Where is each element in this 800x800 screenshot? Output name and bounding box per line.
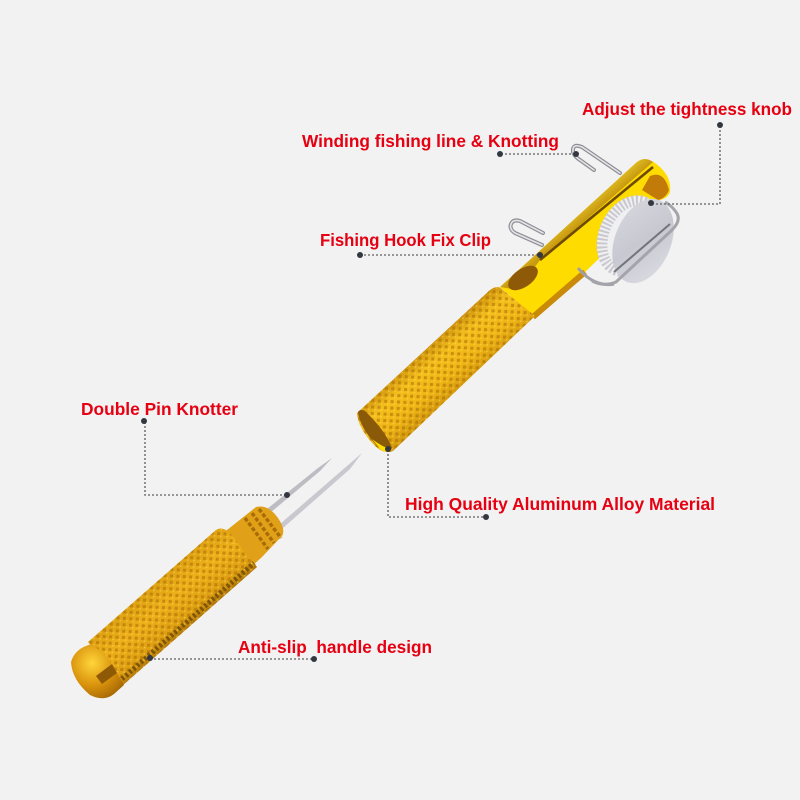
label: winding: Winding fishing line & Knotting [302, 131, 559, 151]
top tool: aluminum body [357, 159, 670, 452]
label: adjust knob: Adjust the tightness knob [582, 99, 792, 119]
icon: winding wire loop [573, 146, 620, 173]
bottom tool: double pin knotter [71, 453, 362, 698]
upper gold band [500, 159, 653, 290]
label: aluminum: High Quality Aluminum Alloy Material [405, 494, 715, 514]
open end of tube [358, 410, 392, 451]
slot opening [504, 261, 542, 295]
leader: knob [648, 122, 723, 206]
pins [267, 458, 332, 513]
leader: handle [147, 655, 317, 662]
label: handle: Anti-slip handle design [238, 637, 432, 657]
label: fix clip: Fishing Hook Fix Clip [320, 230, 491, 250]
dotted lower band of handle [122, 563, 254, 679]
threaded neck [222, 506, 283, 566]
icon: tightness knob [578, 185, 685, 292]
leader: double pin [141, 418, 290, 498]
label: double pin: Double Pin Knotter [81, 399, 238, 419]
knurled grip [357, 287, 535, 452]
end cap [71, 644, 124, 698]
leader: fix clip [357, 252, 543, 258]
smooth slotted head [500, 159, 670, 317]
icon: fishing hook fix clip [510, 220, 543, 245]
leader: winding [497, 151, 579, 157]
knurled handle [88, 529, 257, 686]
leader: aluminum [385, 446, 489, 520]
